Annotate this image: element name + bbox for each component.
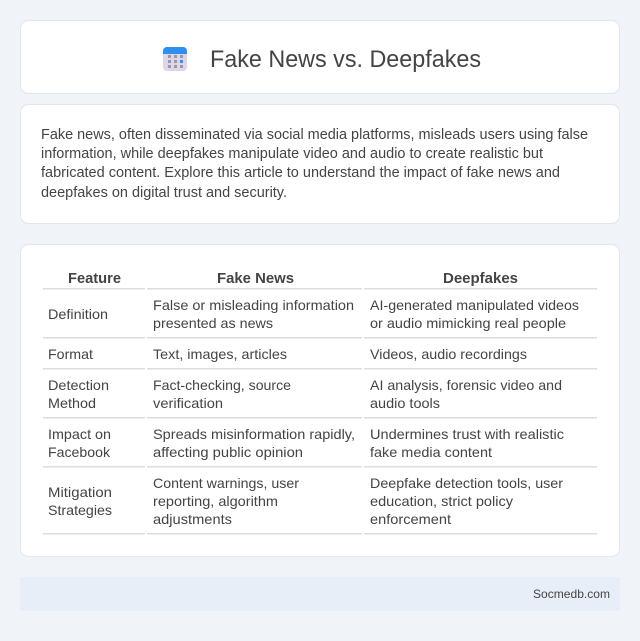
panel: comparison table card — [20, 244, 620, 556]
table header row: Deepfakes — [443, 270, 518, 287]
table row: detection method — [48, 377, 562, 411]
table row: impact on Facebook: Spreads misinformation rapidly, — [153, 426, 355, 442]
table row: format: Videos, audio recordings — [370, 346, 527, 362]
table row: detection method: verification — [153, 395, 223, 411]
table header row: Fake News — [217, 270, 294, 287]
title: Fake News vs. Deepfakes — [210, 46, 481, 73]
table row: mitigation strategies — [48, 475, 563, 527]
table row: mitigation strategies: Content warnings, user — [153, 475, 299, 491]
table row: definition: Definition — [48, 306, 108, 322]
table header row: Feature — [68, 270, 121, 287]
table row: impact on Facebook: Impact on — [48, 426, 111, 442]
table row: impact on Facebook: fake media content — [370, 444, 492, 460]
table row: mitigation strategies: education, strict policy — [370, 493, 513, 509]
table row: definition — [48, 297, 579, 331]
table row: impact on Facebook: Undermines trust with realistic — [370, 426, 564, 442]
table header row — [68, 270, 518, 287]
table row: mitigation strategies: Deepfake detection tools, user — [370, 475, 563, 491]
text block: introduction: deepfakes on digital trust and security. — [41, 185, 287, 201]
table row: format: Format — [48, 346, 93, 362]
table row: definition: False or misleading information — [153, 297, 354, 313]
table row: detection method: audio tools — [370, 395, 440, 411]
panel: title card — [20, 20, 620, 94]
table row: format — [48, 346, 527, 362]
text block: introduction: fabricated content. Explore this article to understand the impact of fake news and — [41, 165, 560, 181]
footer source text: Socmedb.com — [533, 587, 610, 601]
table row: detection method: AI analysis, forensic video and — [370, 377, 562, 393]
table row: mitigation strategies: enforcement — [370, 511, 451, 527]
table row: definition: presented as news — [153, 315, 273, 331]
table row: impact on Facebook: affecting public opinion — [153, 444, 303, 460]
table row: mitigation strategies: reporting, algorithm — [153, 493, 278, 509]
table row: detection method: Detection — [48, 377, 109, 393]
table row: definition: or audio mimicking real people — [370, 315, 566, 331]
table row: definition: AI-generated manipulated videos — [370, 297, 579, 313]
table row: mitigation strategies: adjustments — [153, 511, 232, 527]
table row: format: Text, images, articles — [153, 346, 287, 362]
text block: introduction — [41, 127, 588, 201]
table row: mitigation strategies: Mitigation — [48, 484, 112, 500]
text block: introduction: Fake news, often disseminated via social media platforms, misleads users using false — [41, 127, 588, 143]
table row: detection method: Method — [48, 395, 96, 411]
table row: impact on Facebook: Facebook — [48, 444, 111, 460]
table row: detection method: Fact-checking, source — [153, 377, 291, 393]
icon: calendar — [163, 47, 187, 71]
table row: mitigation strategies: Strategies — [48, 502, 112, 518]
footer bar — [20, 577, 620, 611]
text block: introduction: information, while deepfakes manipulate video and audio to create realistic but — [41, 146, 543, 162]
table row: impact on Facebook — [48, 426, 564, 460]
panel: intro text card — [20, 104, 620, 224]
